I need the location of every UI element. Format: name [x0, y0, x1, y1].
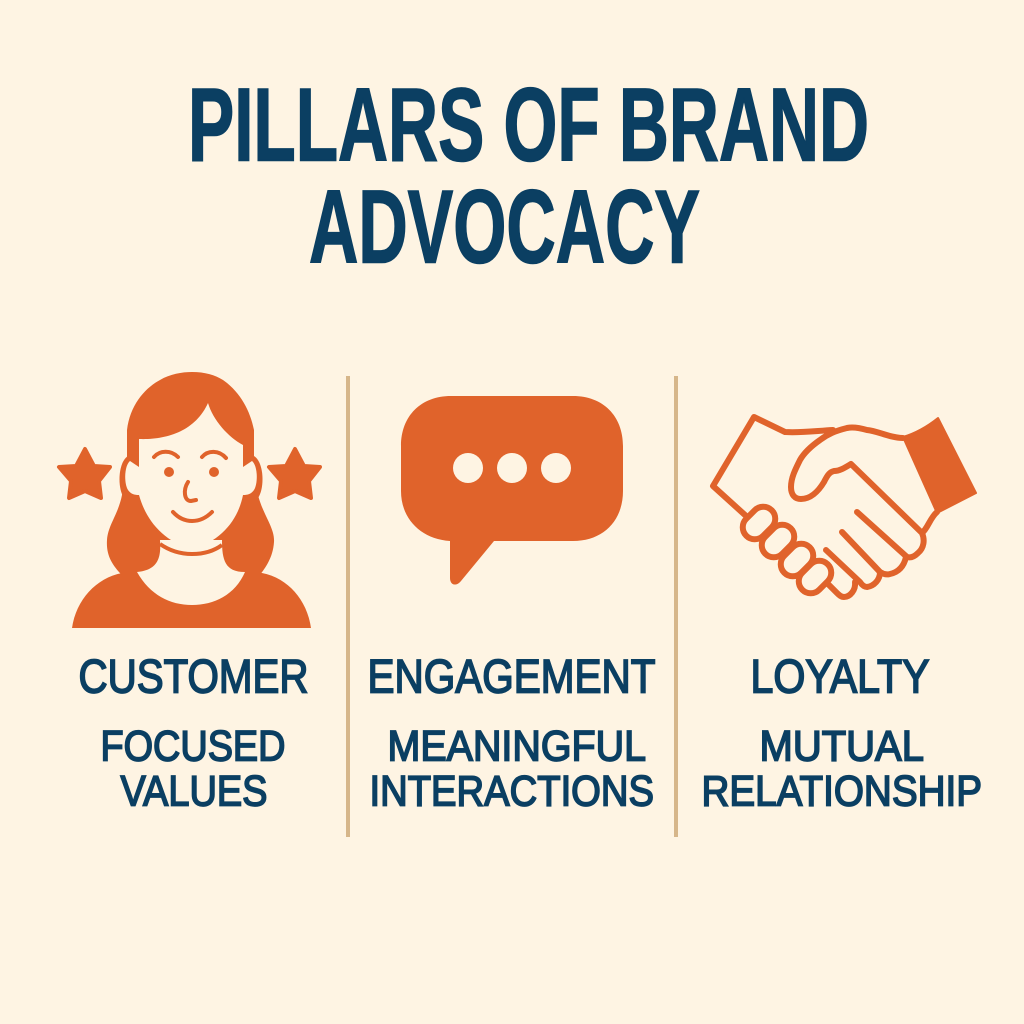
text: meaningful interactions: INTERACTIONS [370, 768, 654, 816]
left ear [119, 456, 139, 498]
face [139, 403, 243, 550]
right hand and thumb [791, 428, 924, 557]
text: focused values: VALUES [120, 768, 268, 816]
jaw line [160, 544, 222, 554]
fingers [842, 532, 906, 574]
knuckles [738, 502, 780, 544]
text: mutual relationship: MUTUAL [760, 722, 924, 770]
icon: speech bubble [401, 396, 623, 585]
icon: left star [59, 449, 110, 498]
icon: customer with stars [59, 372, 320, 628]
left hand [713, 417, 833, 515]
shoulders [72, 573, 311, 628]
label: engagement: ENGAGEMENT [368, 650, 656, 702]
right ear [243, 456, 263, 498]
panel: customer [59, 372, 320, 816]
neck and collar [137, 540, 245, 605]
panel: loyalty [702, 417, 982, 816]
text: focused values [100, 722, 286, 816]
label: loyalty: LOYALTY [750, 650, 930, 702]
panel: engagement [368, 396, 656, 816]
text: meaningful interactions [370, 722, 654, 816]
text: mutual relationship [702, 722, 982, 816]
title [188, 68, 869, 286]
icon: right star [269, 449, 320, 498]
facial features [154, 452, 226, 521]
text: focused values: FOCUSED [100, 722, 286, 770]
cuff [903, 418, 976, 513]
hair [107, 372, 274, 575]
text: mutual relationship: RELATIONSHIP [702, 768, 982, 816]
title: ADVOCACY [309, 170, 700, 286]
label: customer: CUSTOMER [78, 650, 308, 702]
text: meaningful interactions: MEANINGFUL [388, 722, 646, 770]
cuff connector [922, 512, 937, 533]
icon: handshake [713, 417, 976, 598]
